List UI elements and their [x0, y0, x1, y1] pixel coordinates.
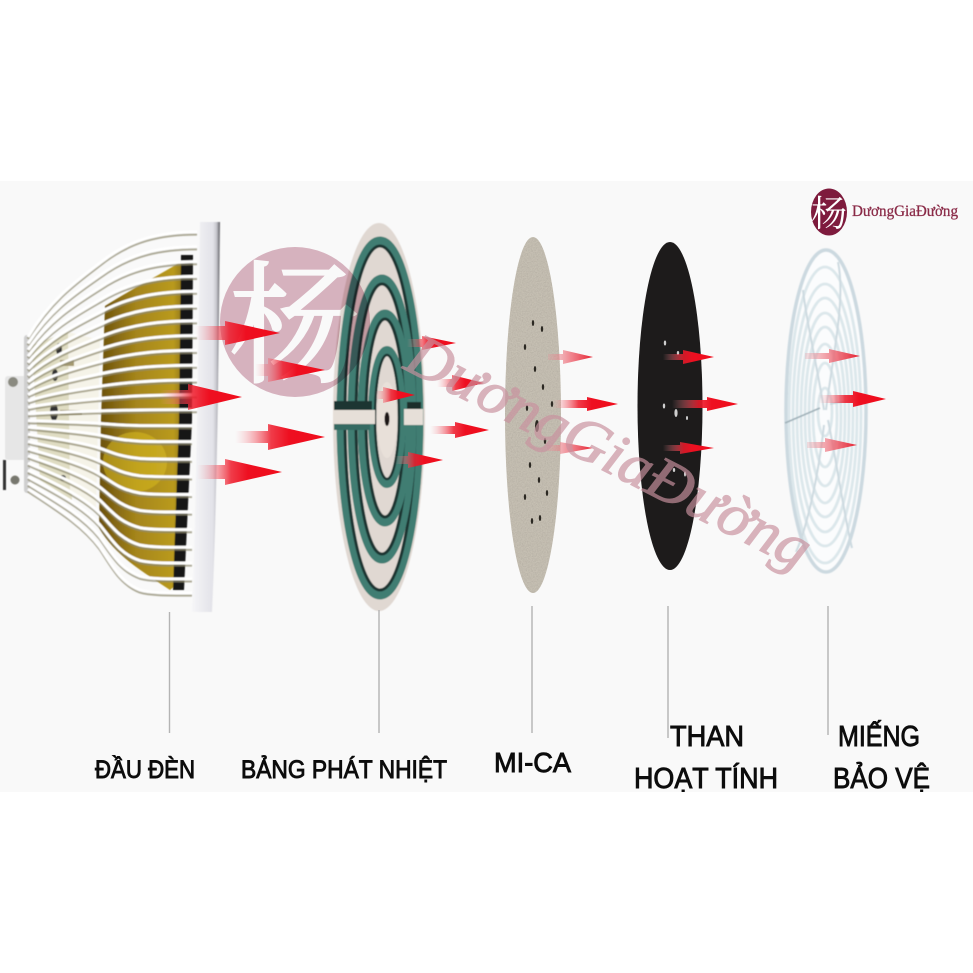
photo background panel — [0, 181, 973, 792]
grille rings — [789, 267, 861, 563]
arrow: grille 1 — [805, 349, 860, 363]
grille seam — [785, 408, 820, 423]
arrow: carbon 3 — [663, 442, 714, 454]
arrow: plate 4 — [430, 422, 489, 438]
plate slit — [333, 382, 423, 458]
carbon body — [638, 242, 702, 570]
arrow: lamp 1 — [195, 321, 280, 345]
arrow: carbon 1 — [663, 350, 714, 364]
arrow: plate 2 — [437, 375, 484, 391]
mica body — [505, 237, 561, 593]
arrow: plate 3 — [375, 387, 415, 403]
arrow: grille 2 — [818, 391, 886, 407]
arrow: carbon 2 — [672, 397, 738, 411]
lamp socket — [32, 332, 100, 510]
label: mica: MI-CA — [494, 747, 571, 778]
label: lamp head: ĐẦU ĐÈN — [95, 755, 195, 784]
logo seal — [811, 188, 847, 236]
watermark seal: 杨 — [229, 220, 361, 410]
leader lines — [170, 606, 828, 738]
cage wires — [28, 232, 197, 595]
logo: 杨 — [811, 186, 847, 237]
reflector highlight — [103, 432, 167, 492]
lamp mount hub — [3, 335, 30, 493]
label: carbon line 1: THAN — [670, 721, 744, 753]
label: carbon line 2: HOẠT TÍNH — [634, 762, 778, 795]
arrow: mica 2 — [552, 397, 618, 411]
watermark text: DươngGiaĐường — [395, 320, 823, 582]
label: heating plate: BẢNG PHÁT NHIỆT — [241, 754, 447, 784]
label: guard line 2: BẢO VỆ — [833, 761, 930, 795]
lamp head — [3, 222, 220, 612]
mica holes — [524, 320, 553, 524]
arrow: mica 1 — [548, 350, 593, 364]
dark teeth strip — [173, 255, 193, 590]
logo wordmark: DươngGiaĐường — [852, 203, 958, 220]
arrow: lamp 2 — [255, 358, 325, 382]
protective grille — [785, 250, 866, 572]
arrow: lamp 3 — [160, 384, 242, 410]
arrow: plate 1 — [407, 336, 456, 350]
carbon holes — [663, 340, 688, 476]
label: guard line 1: MIẾNG — [838, 719, 920, 753]
heating coil rings — [341, 241, 419, 595]
gold reflector — [99, 255, 192, 590]
grille rim — [786, 250, 866, 572]
arrow: lamp 4 — [235, 424, 325, 450]
arrow: lamp 5 — [197, 459, 282, 485]
arrow: grille 3 — [807, 438, 857, 452]
arrow: plate 5 — [395, 452, 443, 468]
activated carbon disc — [638, 242, 702, 570]
heating plate — [333, 223, 425, 611]
grille spokes — [796, 262, 852, 552]
bottom white band — [0, 792, 973, 973]
mica disc — [505, 237, 561, 593]
lamp rim — [192, 222, 220, 612]
plate body — [333, 223, 425, 611]
heat arrows — [160, 321, 886, 485]
logo — [811, 186, 958, 237]
arrow: mica 3 — [547, 442, 593, 454]
